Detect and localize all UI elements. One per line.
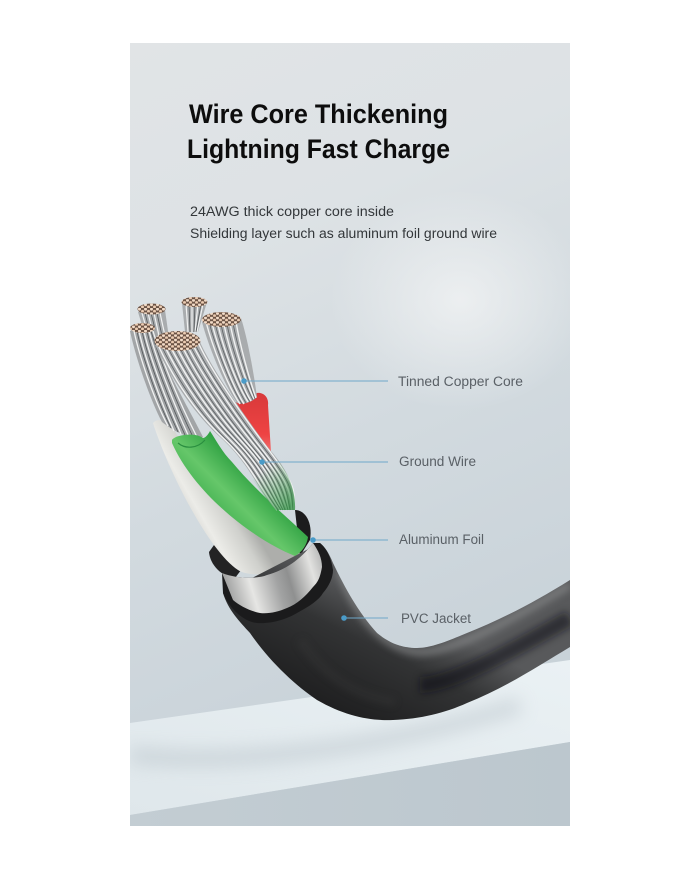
strand bundle: main front (154, 331, 295, 510)
callout: PVC Jacket: PVC Jacket (401, 611, 471, 626)
callout: Tinned Copper Core: Tinned Copper Core (398, 374, 523, 389)
strand bundle: back centre (182, 297, 208, 332)
description text: Shielding layer such as aluminum foil ground wire (190, 226, 497, 241)
callout: Aluminum Foil (310, 532, 484, 547)
inner shadow left (209, 545, 240, 577)
jacket inner ring (222, 543, 333, 623)
callout: Ground Wire (259, 454, 476, 469)
strand bundle: far left (130, 323, 203, 438)
white insulated wire (153, 420, 300, 574)
callout: Ground Wire: Ground Wire (399, 454, 476, 469)
title (187, 99, 450, 164)
title: Wire Core Thickening (189, 99, 448, 129)
strand bundle: back right (202, 312, 257, 404)
strand bundle: back left (138, 304, 168, 336)
aluminum foil sleeve (222, 543, 322, 613)
panel: background (130, 43, 590, 826)
description text: 24AWG thick copper core inside (190, 204, 394, 219)
illustration: cable cross-section (130, 297, 570, 720)
description text (190, 204, 497, 241)
callout: PVC Jacket (341, 611, 471, 626)
PVC jacket (223, 543, 570, 720)
panel: display shelf (130, 660, 570, 826)
inner shadow behind wires (295, 510, 311, 556)
red wire (236, 392, 271, 451)
callout: Tinned Copper Core (241, 374, 523, 389)
infographic canvas (130, 43, 570, 826)
callout: Aluminum Foil: Aluminum Foil (399, 532, 484, 547)
green insulated wire (172, 431, 308, 556)
title: Lightning Fast Charge (187, 134, 450, 164)
